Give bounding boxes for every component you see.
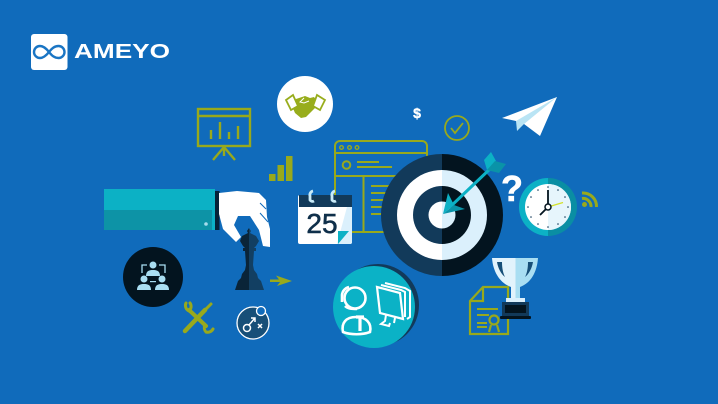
icon: clock — [519, 178, 577, 236]
logo mark: infinity tile — [31, 34, 68, 70]
browser window outline — [335, 141, 427, 232]
icon: wifi signal — [582, 193, 597, 207]
icon: calendar — [298, 191, 352, 244]
hand — [219, 191, 270, 247]
logo: Ameyo — [31, 34, 170, 70]
icon: presentation board — [198, 109, 250, 160]
logo wordmark: AMEYO — [74, 41, 170, 63]
icon: handshake badge — [277, 76, 333, 132]
icon: org network badge — [123, 247, 183, 307]
icon: paper plane — [502, 97, 557, 136]
agent and monitor badge — [333, 264, 419, 348]
icon: bar chart — [269, 156, 292, 181]
icon: calendar: 25 — [306, 208, 338, 239]
icon: check mark circle — [445, 116, 469, 140]
sleeve — [104, 189, 220, 230]
icon: question mark: ? — [501, 168, 523, 209]
icon: certificate document — [470, 287, 508, 334]
icon: wrench and screwdriver — [185, 303, 213, 332]
arrow: olive right — [270, 276, 292, 286]
icon: computer monitor — [377, 283, 410, 326]
arrow in target — [443, 152, 506, 214]
chess queen — [235, 228, 264, 290]
icon: strategy badge — [237, 306, 269, 339]
icon: trophy — [492, 258, 538, 319]
target — [381, 154, 503, 276]
icon: dollar sign: $ — [413, 105, 421, 121]
icon: support agent — [342, 287, 370, 334]
